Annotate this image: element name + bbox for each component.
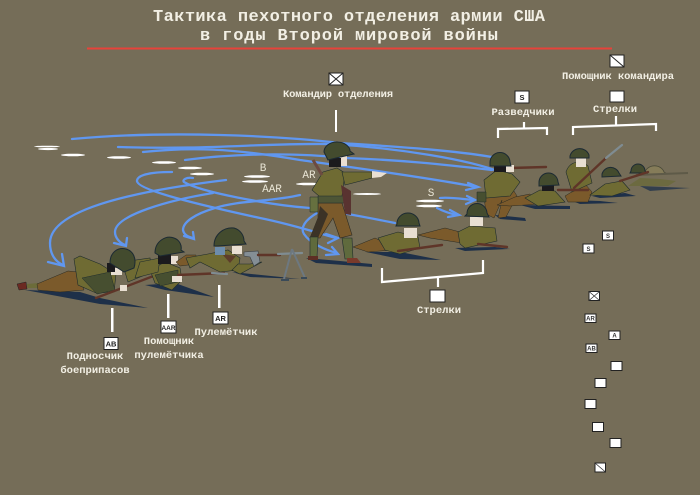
- formation legend icons: AB: [587, 346, 596, 352]
- icon: assistant leader: [610, 55, 624, 67]
- movement arrows: [48, 134, 500, 266]
- soldier: far rifleman (tan silhouette): [628, 164, 690, 191]
- soldier: prone rifleman right: [590, 167, 648, 198]
- label: assistant leader: Помощник командира: [562, 71, 675, 83]
- soldier: automatic rifleman with BAR: [176, 228, 307, 281]
- soldier: prone scout: [497, 173, 588, 209]
- tracer marks: [34, 146, 444, 207]
- icon: rifleman bottom: [430, 290, 445, 302]
- soldier: assistant gunner: [135, 237, 227, 297]
- soldier: prone rifleman with raised hand: [418, 203, 510, 251]
- icon: riflemen top: [610, 91, 624, 102]
- formation legend icons: A: [612, 334, 617, 340]
- label: assistant gunner: [134, 336, 204, 362]
- soldier: ammo bearer: [17, 249, 164, 308]
- title: [153, 8, 546, 46]
- map letters: AR: [302, 170, 316, 182]
- icon: AAR: [161, 321, 176, 333]
- soldier: kneeling scout: [477, 152, 546, 221]
- formation legend icons: AR: [586, 316, 595, 322]
- soldier: squad leader standing: [306, 142, 387, 267]
- icon: squad leader: [329, 73, 343, 85]
- leader pointer line: [335, 110, 337, 132]
- label: ammo bearer: боеприпасов: [60, 364, 130, 377]
- title: в годы Второй мировой войны: [200, 27, 498, 46]
- formation legend icons: S: [586, 247, 591, 253]
- soldier: sitting rifleman: [565, 145, 622, 204]
- label: riflemen top: Стрелки: [593, 104, 637, 116]
- map letters: S: [428, 188, 435, 200]
- map letters: AAR: [262, 184, 282, 196]
- icon: AB: AB: [106, 340, 117, 348]
- icon: AR: [213, 312, 228, 324]
- label: squad leader: Командир отделения: [283, 89, 393, 101]
- title: Тактика пехотного отделения армии США: [153, 8, 546, 27]
- formation legend icons: [583, 231, 622, 472]
- label: scouts: Разведчики: [491, 107, 555, 119]
- label: gunner: Пулемётчик: [194, 327, 258, 339]
- label: bottom riflemen: Стрелки: [417, 305, 461, 317]
- label: ammo bearer: [60, 351, 130, 377]
- icon: scouts: S: [519, 93, 525, 102]
- map letters: B: [260, 163, 267, 175]
- pointer lines for gun team: [111, 285, 220, 332]
- label: assistant gunner: Помощник: [144, 336, 194, 348]
- icon: AB: [104, 338, 118, 350]
- map letters: [260, 163, 435, 200]
- label: assistant gunner: пулемётчика: [134, 350, 204, 362]
- formation legend icons: S: [606, 234, 610, 240]
- soldier: prone rifleman centre: [353, 213, 442, 260]
- icon: scouts: [515, 91, 529, 103]
- icon: AR: AR: [215, 314, 226, 323]
- label: ammo bearer: Подносчик: [67, 351, 123, 363]
- top rifle bracket: [573, 116, 656, 135]
- title underline: [87, 48, 612, 50]
- icon: AAR: AAR: [161, 325, 176, 332]
- scouts bracket: [498, 122, 547, 138]
- bottom rifle bracket: [382, 260, 483, 287]
